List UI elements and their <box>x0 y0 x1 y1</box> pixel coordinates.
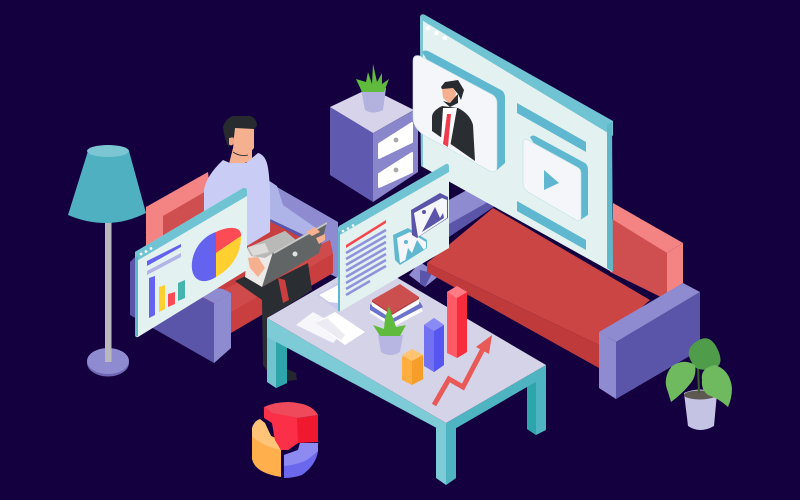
face <box>233 128 254 156</box>
sofa back <box>613 203 683 253</box>
plant on nightstand <box>356 64 389 112</box>
red slice <box>264 407 318 450</box>
books <box>370 284 423 327</box>
table legs <box>267 335 287 388</box>
legs <box>235 263 312 372</box>
laptop <box>245 231 298 287</box>
blue slice <box>284 443 318 478</box>
panel: article window <box>338 164 449 312</box>
table plant <box>373 306 406 355</box>
nightstand <box>330 88 418 202</box>
text bars <box>517 103 586 152</box>
sofa right arm <box>616 292 700 399</box>
panel: left chart <box>130 188 247 337</box>
drawers <box>379 123 412 158</box>
pie chart <box>192 228 241 281</box>
bar: blue <box>424 318 444 372</box>
orange slice <box>252 428 281 477</box>
man on laptop <box>204 116 327 381</box>
floor lamp <box>68 145 146 376</box>
person card <box>413 50 505 172</box>
coffee table <box>267 260 546 485</box>
bar: red <box>447 286 467 358</box>
play icon <box>544 170 559 190</box>
sofa <box>409 190 700 399</box>
potted plant <box>666 338 732 430</box>
3d pie chart <box>252 402 318 478</box>
table top <box>267 318 446 433</box>
sofa left arm <box>449 190 495 237</box>
image card teal <box>393 228 427 265</box>
image card purple <box>411 193 448 238</box>
growth arrow <box>434 335 492 405</box>
ear <box>228 136 234 146</box>
hands <box>248 257 265 277</box>
armchair <box>130 172 338 363</box>
bar: orange <box>402 349 423 385</box>
article lines <box>346 230 386 295</box>
heading lines <box>147 244 181 266</box>
businessman <box>432 80 475 161</box>
video card <box>523 136 588 221</box>
bar chart <box>149 276 185 318</box>
arm <box>268 180 316 236</box>
neck <box>229 148 252 165</box>
hair <box>223 116 257 148</box>
sofa seat <box>427 208 650 345</box>
torso <box>204 153 270 246</box>
article heading <box>346 220 386 248</box>
back laptop on table <box>317 282 340 312</box>
papers <box>296 312 365 345</box>
panel: big browser window <box>413 14 613 272</box>
